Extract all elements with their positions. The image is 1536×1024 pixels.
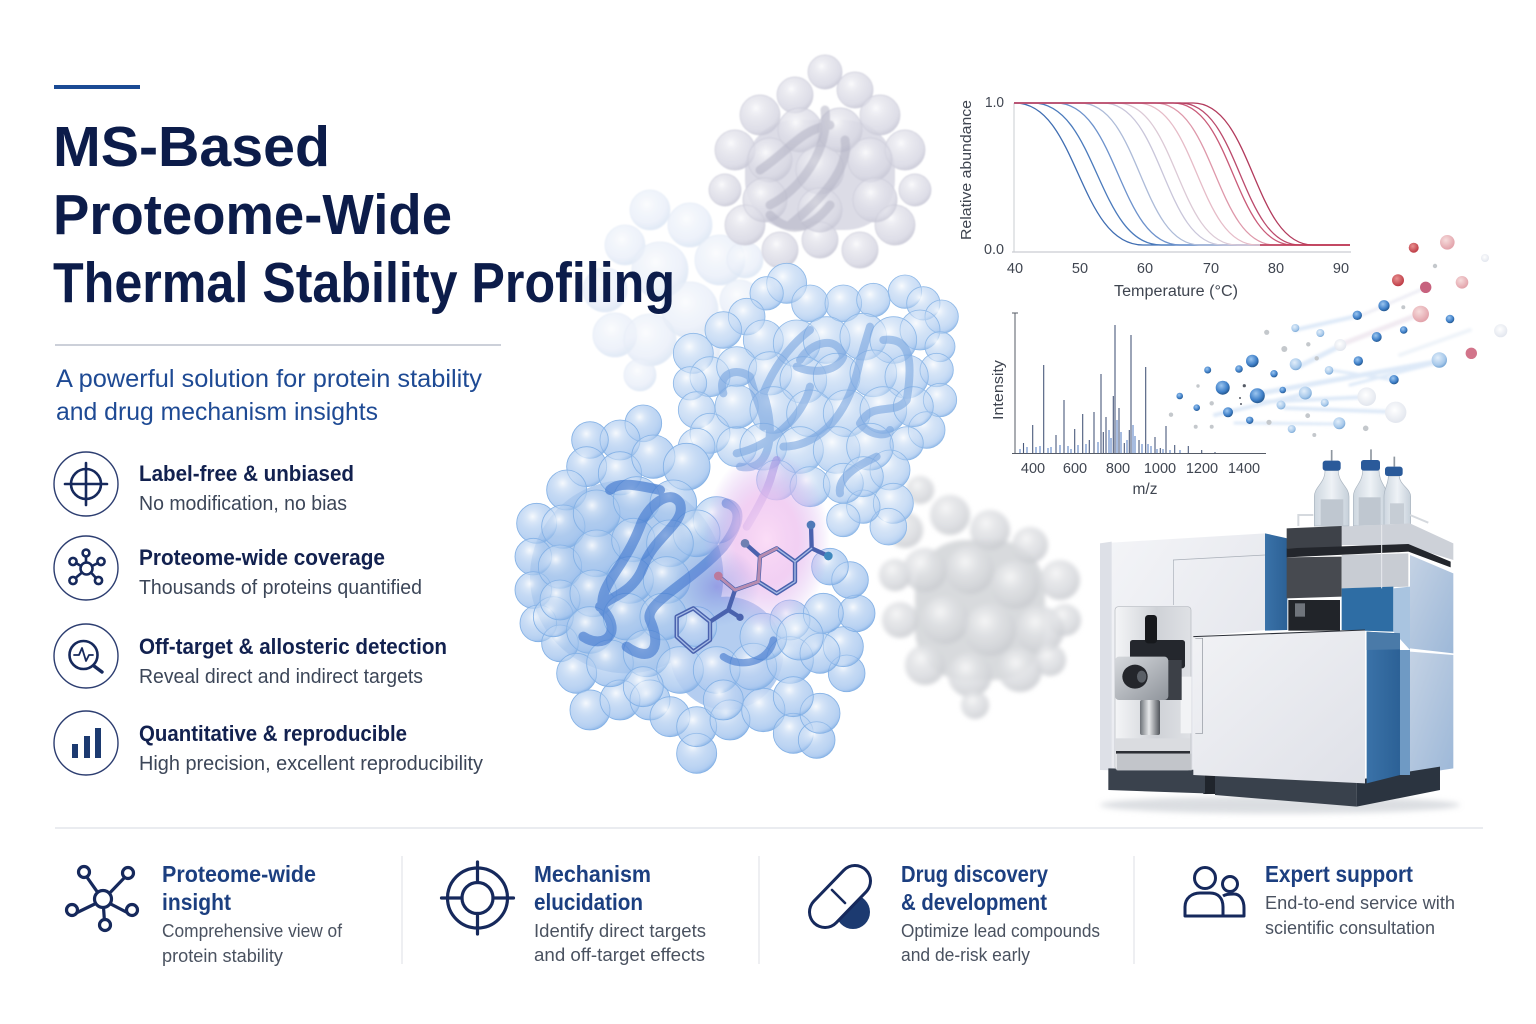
subtitle	[56, 365, 483, 426]
mass spectrum chart: m/z	[1133, 481, 1157, 498]
benefit: proteome-wide insight: Comprehensive view of	[162, 920, 343, 941]
feature: label-free: Label-free & unbiased	[139, 461, 354, 486]
feature: label-free	[54, 452, 354, 516]
benefit: drug discovery: Drug discovery	[901, 861, 1048, 887]
benefit: drug discovery: & development	[901, 889, 1047, 915]
accent bar	[54, 85, 140, 89]
melting curves chart	[958, 95, 1351, 300]
mass spectrum chart: Intensity	[990, 359, 1007, 420]
title	[53, 115, 675, 315]
benefit: expert support: scientific consultation	[1265, 917, 1435, 938]
melting curves chart: Temperature (°C)	[1114, 283, 1238, 300]
melting curves chart: 70	[1203, 261, 1219, 277]
benefit: drug discovery	[825, 861, 1100, 965]
ion source bay	[1115, 607, 1192, 770]
subtitle: A powerful solution for protein stability	[56, 365, 483, 393]
feature: off-target: Off-target & allosteric detection	[139, 634, 447, 659]
benefit: expert support: End-to-end service with	[1265, 892, 1455, 913]
melting curves chart: 1.0	[985, 95, 1004, 111]
upper tower	[1265, 523, 1453, 775]
benefit: mechanism elucidation: and off-target effects	[534, 944, 705, 965]
benefit: proteome-wide insight: insight	[162, 889, 231, 915]
mass spectrum chart: 600	[1063, 461, 1087, 477]
ligand molecule	[677, 521, 833, 652]
protein lobe: lower	[515, 405, 875, 773]
main body	[1100, 533, 1265, 773]
mass spectrum chart: 1400	[1228, 461, 1260, 477]
melting curves chart: 50	[1072, 261, 1088, 277]
solvent bottles	[1298, 449, 1428, 526]
feature: quantitative: High precision, excellent reproducibility	[139, 752, 484, 775]
benefit: proteome-wide insight	[66, 861, 343, 966]
melting curves chart: 80	[1268, 261, 1284, 277]
title: MS-Based	[53, 115, 330, 179]
protein: grey lower right	[879, 476, 1081, 719]
mass spectrum chart	[990, 313, 1266, 498]
melting curves chart: 40	[1007, 261, 1023, 277]
benefit: mechanism elucidation: elucidation	[534, 889, 643, 915]
benefit: proteome-wide insight: protein stability	[162, 945, 284, 966]
protein: central blue protein with bound ligand	[515, 263, 958, 773]
mass spectrum chart: 1000	[1144, 461, 1176, 477]
feature: coverage	[54, 536, 422, 600]
feature: coverage: Thousands of proteins quantified	[139, 576, 422, 599]
feature: quantitative	[54, 711, 484, 775]
ribbons: lower lobe	[583, 485, 773, 663]
protein: grey top	[709, 55, 931, 268]
melting curves chart: 90	[1333, 261, 1349, 277]
mass spectrum chart: 800	[1106, 461, 1130, 477]
protein: pale background left	[583, 190, 763, 391]
ion spray particles	[1169, 235, 1507, 437]
front panel	[1193, 630, 1365, 783]
protein lobe: upper	[673, 263, 958, 545]
benefit: proteome-wide insight: Proteome-wide	[162, 861, 316, 887]
benefit: expert support	[1185, 861, 1455, 938]
melting curves chart: Relative abundance	[958, 100, 975, 240]
benefit: drug discovery: and de-risk early	[901, 944, 1031, 965]
benefit: mechanism elucidation	[442, 861, 706, 965]
benefit: expert support: Expert support	[1265, 861, 1413, 887]
benefit: drug discovery: Optimize lead compounds	[901, 920, 1100, 941]
subtitle: and drug mechanism insights	[56, 398, 378, 426]
mass spectrometer instrument	[1100, 449, 1460, 814]
binding site glow	[673, 450, 830, 630]
feature: quantitative: Quantitative & reproducible	[139, 721, 407, 746]
feature: off-target: Reveal direct and indirect targets	[139, 665, 423, 688]
feature: label-free: No modification, no bias	[139, 492, 347, 515]
melting curves chart: 0.0	[984, 242, 1004, 258]
ribbons: upper lobe	[722, 327, 910, 527]
base	[1108, 767, 1440, 807]
floor shadow	[1100, 796, 1460, 814]
feature: coverage: Proteome-wide coverage	[139, 545, 385, 570]
melting curves chart: 60	[1137, 261, 1153, 277]
title: Proteome-Wide	[53, 183, 452, 247]
title: Thermal Stability Profiling	[53, 251, 675, 315]
benefit: mechanism elucidation: Identify direct targets	[534, 920, 706, 941]
feature list	[54, 452, 484, 775]
feature: off-target	[54, 624, 447, 688]
mass spectrum chart: 400	[1021, 461, 1045, 477]
mass spectrum chart: 1200	[1186, 461, 1218, 477]
benefit: mechanism elucidation: Mechanism	[534, 861, 651, 887]
